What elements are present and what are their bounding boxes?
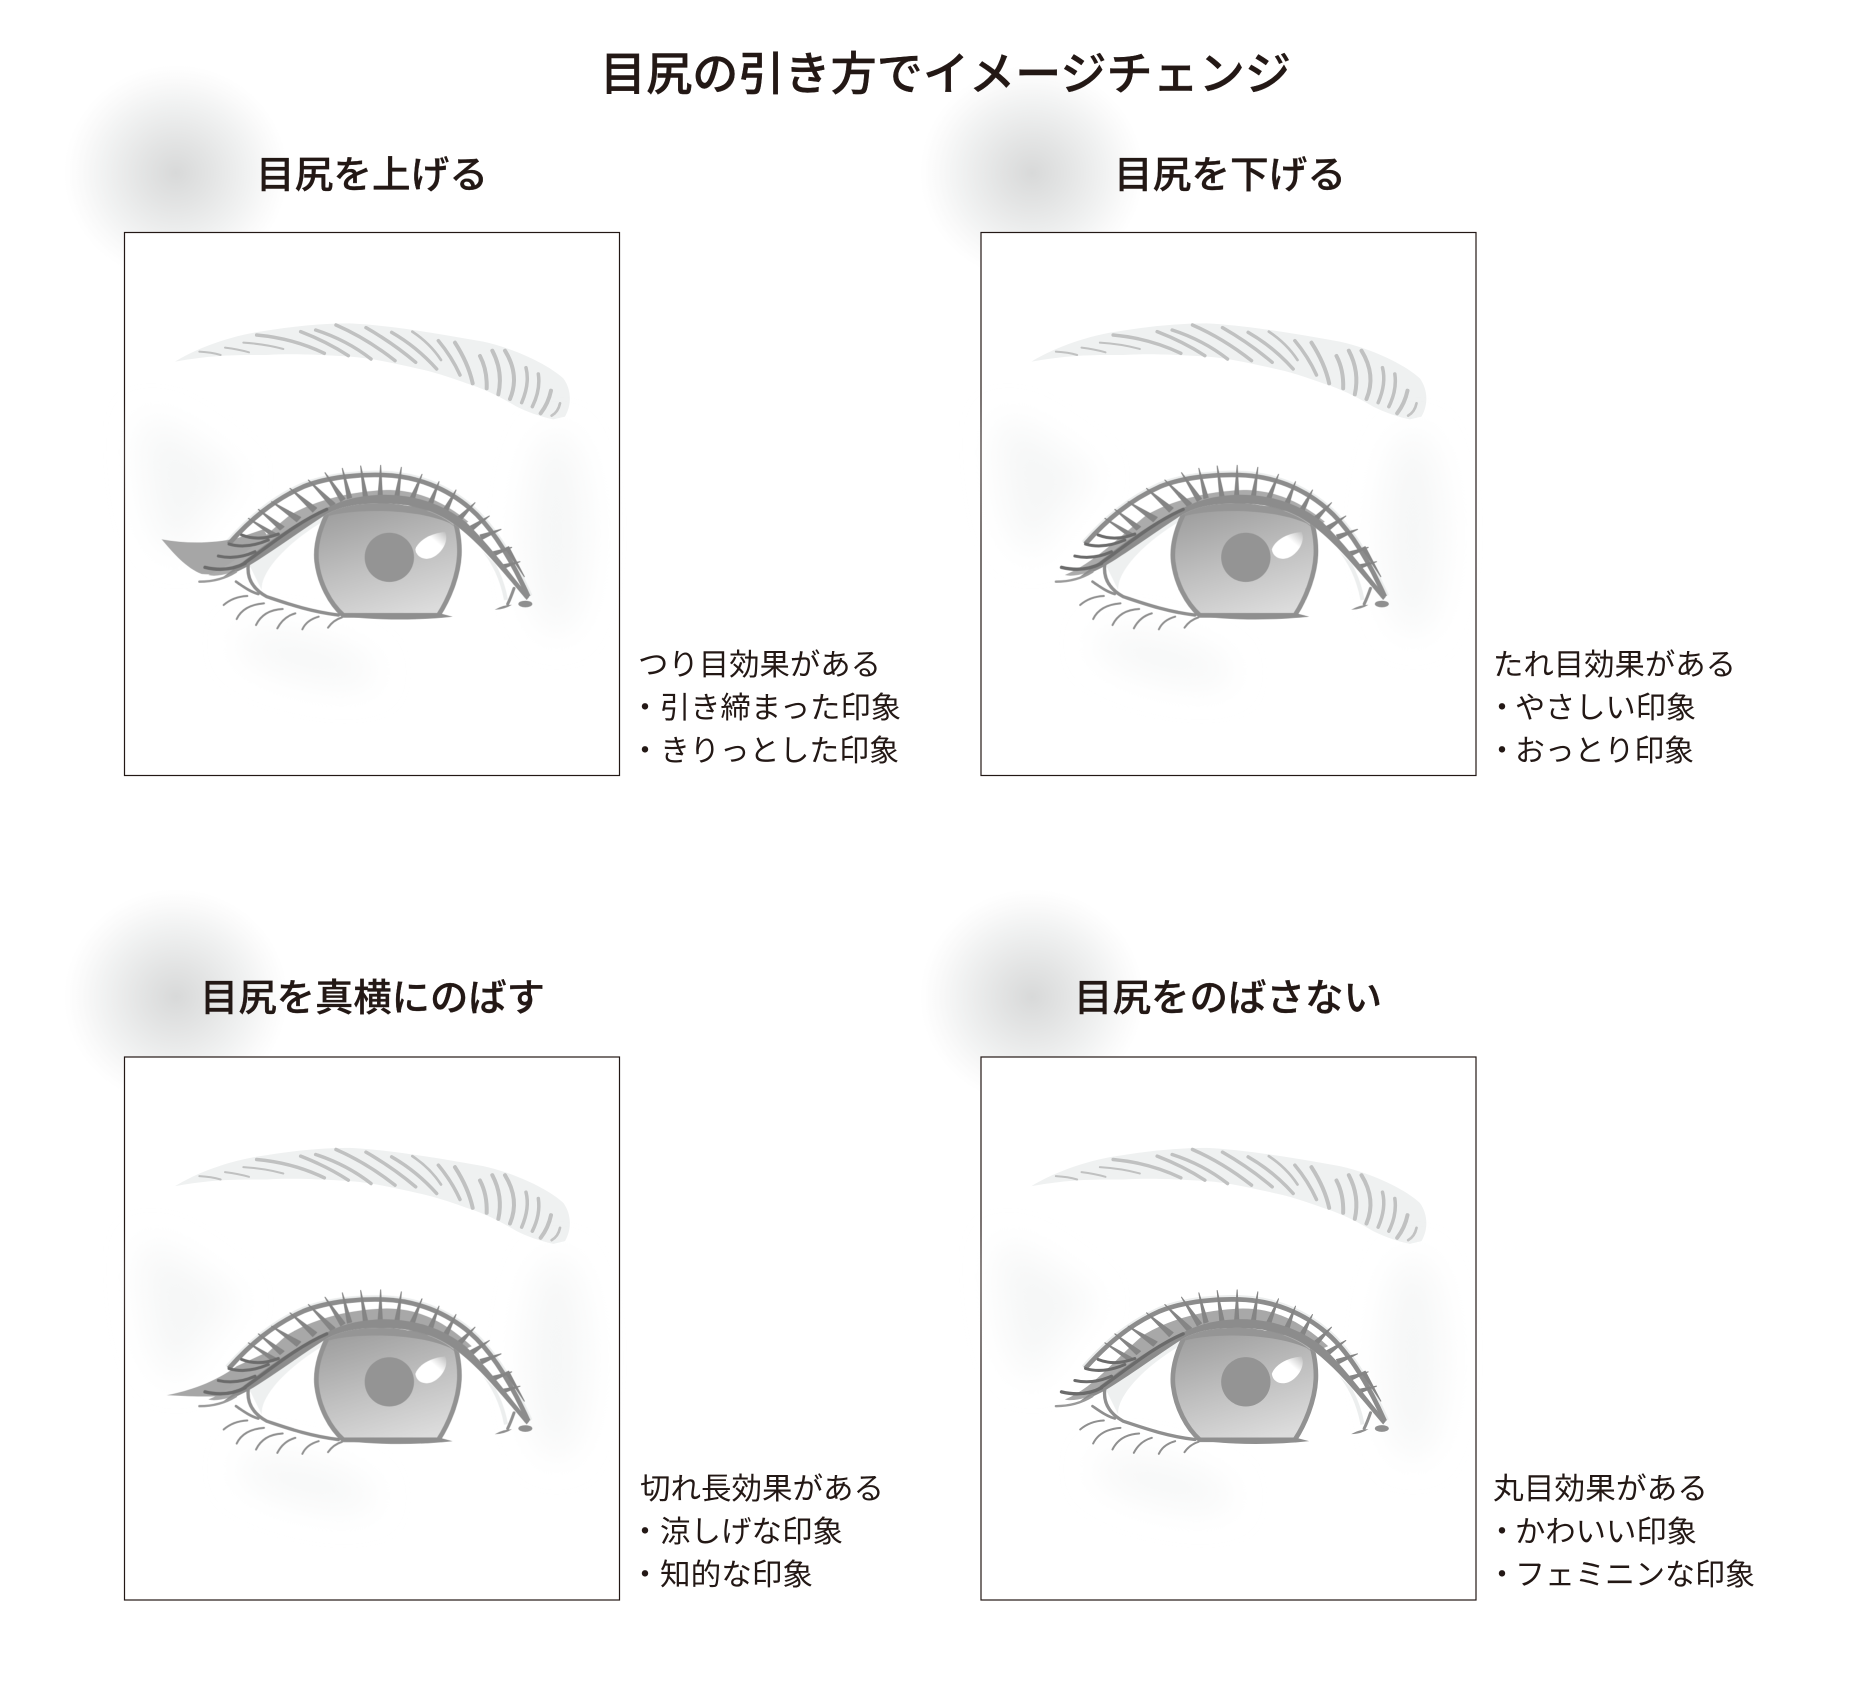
caption: ・ <box>1487 735 1517 768</box>
heading: 目尻を真横にのばす <box>200 978 545 1020</box>
caption: 切れ長効果がある <box>640 1473 884 1506</box>
caption: 丸目効果がある <box>1493 1473 1708 1506</box>
caption <box>1487 1473 1755 1592</box>
caption <box>1487 649 1736 768</box>
caption: 涼しげな印象 <box>660 1516 843 1549</box>
illustration frame <box>124 232 620 776</box>
eyebrow <box>175 323 570 419</box>
eyeliner wing <box>162 529 270 574</box>
panel: lower outer corner <box>920 65 1736 776</box>
caption: ・ <box>630 1559 660 1592</box>
caption: ・ <box>630 692 660 725</box>
caption: おっとり印象 <box>1515 735 1694 768</box>
heading shadow <box>64 889 288 1105</box>
eye with horizontal wing <box>143 1245 587 1519</box>
eye with drooping liner <box>999 420 1443 695</box>
caption: たれ目効果がある <box>1493 649 1736 682</box>
caption: ・ <box>1487 692 1517 725</box>
caption: ・ <box>1487 1516 1517 1549</box>
eyebrow <box>1031 323 1426 419</box>
panel: extend horizontally <box>64 889 884 1600</box>
eyeliner wing <box>167 1354 270 1396</box>
caption: 知的な印象 <box>660 1559 813 1592</box>
caption <box>630 649 901 768</box>
eyebrow <box>1031 1148 1426 1244</box>
caption: つり目効果がある <box>638 649 881 682</box>
heading shadow <box>920 65 1144 281</box>
caption: ・ <box>630 1516 660 1549</box>
caption: やさしい印象 <box>1515 692 1696 725</box>
caption: 引き締まった印象 <box>660 692 901 725</box>
caption: かわいい印象 <box>1515 1516 1697 1549</box>
heading shadow <box>64 65 288 281</box>
title: 目尻の引き方でイメージチェンジ <box>600 48 1291 100</box>
caption <box>630 1473 884 1592</box>
caption: きりっとした印象 <box>660 735 899 768</box>
panel: do not extend <box>920 889 1755 1600</box>
caption: ・ <box>1487 1559 1517 1592</box>
caption: ・ <box>630 735 660 768</box>
panel: raise outer corner <box>64 65 901 776</box>
heading shadow <box>920 889 1144 1105</box>
eyebrow <box>175 1148 570 1244</box>
heading: 目尻をのばさない <box>1074 978 1382 1020</box>
illustration frame <box>981 1057 1476 1600</box>
caption: フェミニンな印象 <box>1515 1559 1755 1592</box>
heading: 目尻を上げる <box>256 155 488 197</box>
round eye <box>999 1245 1443 1519</box>
illustration frame <box>981 232 1476 776</box>
illustration frame <box>124 1057 620 1600</box>
heading: 目尻を下げる <box>1114 155 1346 197</box>
eye with raised wing <box>143 420 587 695</box>
